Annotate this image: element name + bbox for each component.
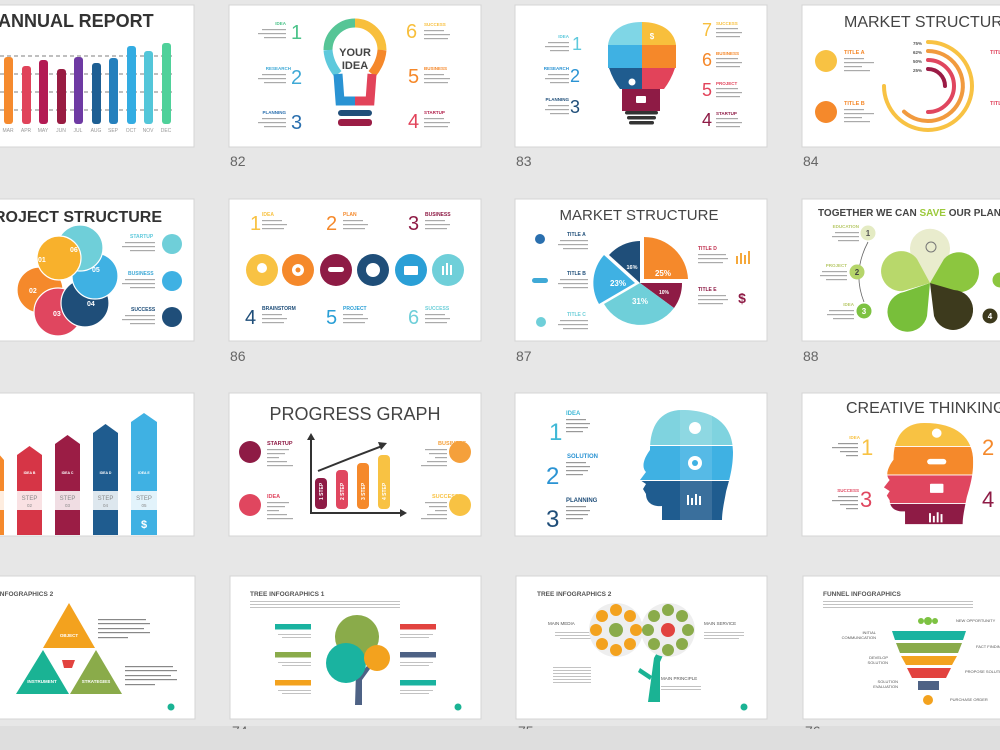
top row items: 1 (250, 213, 261, 235)
slide: annual report: OCT (126, 128, 136, 134)
left items: IDEA (275, 21, 287, 26)
left items: 2 (570, 66, 580, 86)
right items: STARTUP (716, 111, 737, 116)
bottom row items: 5 (326, 307, 337, 329)
right items: BUSINESS (424, 66, 447, 71)
slide 88: save our planet: 4 (988, 312, 993, 321)
title: MARKET STRUCTURE (560, 207, 718, 224)
slide 84: market structure rings: TITLE A (844, 50, 865, 56)
slide 87: market structure pie (515, 199, 767, 341)
top row items: 3 (408, 213, 419, 235)
right items: 5 (408, 66, 419, 88)
slide: annual report: MAR (2, 128, 14, 134)
slide: funnel infographics: EVALUATION (873, 684, 898, 689)
slide: progress graph (229, 393, 481, 536)
right items: BUSINESS (128, 271, 154, 277)
slide: funnel infographics: SOLUTION (878, 679, 898, 684)
right items (128, 234, 156, 313)
right items: SUCCESS (716, 21, 738, 26)
chart: axes and bars: 2 STEP (340, 482, 346, 500)
title: TREE INFOGRAPHICS 1 (250, 591, 325, 598)
slide: tree infographics 2: MAIN PRINCIPLE (661, 676, 697, 681)
slide: progress graph: SUCCESS (432, 494, 459, 500)
slide: tree infographics 2 (516, 576, 767, 719)
petal circles: 05 (92, 267, 100, 274)
tree illustration (326, 615, 390, 705)
slide: progress graph: BUSINESS (438, 441, 466, 447)
pie chart (593, 237, 688, 325)
slide numbers: 84 (803, 153, 819, 169)
right icons (449, 441, 471, 463)
left items: 3 (291, 112, 302, 134)
icon: segmented bulb (608, 22, 676, 124)
items: 3 (860, 487, 872, 512)
arrows: 02 (27, 503, 32, 508)
left items: PLANNING (262, 110, 286, 115)
slide: annual report: AUG (91, 128, 102, 134)
pie chart: 31% (632, 297, 648, 306)
petal circles: 04 (87, 301, 95, 308)
chart: axes and bars (307, 433, 407, 517)
slide: head blue (515, 393, 767, 536)
slide: tree infographics 1 (230, 576, 481, 719)
title: PROGRESS GRAPH (269, 404, 441, 424)
arrows: 03 (65, 503, 70, 508)
slide 86: six circles: IDEA (262, 212, 274, 218)
pie chart: 10% (659, 290, 670, 296)
numbered items: PLANNING (566, 498, 598, 504)
slide numbers: 88 (803, 348, 819, 364)
slide: tree infographics 2: MAIN SERVICE (704, 621, 736, 626)
icon: idea bulb: IDEA (342, 60, 368, 72)
slide: tree infographics 2: MAIN MEDIA (548, 621, 575, 626)
items: 4 (982, 487, 994, 512)
right items (698, 246, 717, 293)
slide: funnel infographics: NEW OPPORTUNITY (956, 618, 996, 623)
left items: RESEARCH (266, 66, 291, 71)
chart: axes and bars: 4 STEP (382, 482, 388, 500)
slide: triangle infographics 2 (0, 576, 195, 719)
right items: 6 (702, 50, 712, 70)
numbered items: 1 (549, 419, 562, 446)
slide: funnel infographics: INITIAL (862, 630, 877, 635)
tree with icon rings (589, 603, 695, 702)
slide 87: market structure pie: TITLE C (567, 312, 586, 318)
right items: 7 (702, 20, 712, 40)
petal circles: 06 (70, 247, 78, 254)
slide 86: six circles: PLAN (343, 212, 357, 218)
left items: 1 (572, 34, 582, 54)
bottom row items: 6 (408, 307, 419, 329)
numbered items: 3 (546, 506, 559, 533)
funnel (892, 617, 966, 705)
triangle diagram: STRATEGIES (82, 679, 110, 684)
arrows: STEP (60, 496, 75, 502)
petal circles: 03 (53, 311, 61, 318)
slide numbers: 75 (518, 723, 534, 739)
bottom row items (245, 307, 419, 329)
bottom row items: 4 (245, 307, 256, 329)
left items (532, 234, 548, 327)
right items: STARTUP (130, 234, 154, 240)
items (837, 435, 994, 512)
pie chart: 16% (626, 265, 638, 271)
numbered items: SOLUTION (567, 454, 598, 460)
slide 87: market structure pie: TITLE A (567, 232, 586, 238)
ring chart: 25% (913, 68, 922, 73)
slide numbers: 83 (516, 153, 532, 169)
arrows: $ (141, 519, 147, 531)
title: TREE INFOGRAPHICS 2 (537, 591, 612, 598)
ring chart: 50% (913, 59, 922, 64)
slide 86: six circles: PROJECT (343, 306, 367, 312)
arrows: IDEA E (138, 471, 150, 475)
slide: funnel infographics (803, 576, 1000, 719)
slide: annual report: MAY (38, 128, 49, 134)
items: IDEA (849, 435, 861, 440)
icon circles row (246, 254, 464, 286)
slide: progress graph: IDEA (267, 494, 280, 500)
left items: RESEARCH (544, 66, 569, 71)
top row items: 2 (326, 213, 337, 235)
slide: creative thinking (802, 393, 1000, 536)
steps left: PROJECT (826, 263, 847, 268)
steps left: EDUCATION (833, 224, 859, 229)
icon: idea bulb (328, 23, 382, 126)
arrows: IDEA D (100, 471, 112, 475)
right items (702, 20, 739, 130)
ring chart: 62% (913, 50, 922, 55)
right items: BUSINESS (716, 51, 739, 56)
right items: 4 (408, 111, 419, 133)
top row items (250, 213, 419, 235)
triangle diagram: INSTRUMENT (27, 679, 57, 684)
triangle diagram: OBJECT (60, 633, 78, 638)
right items: 6 (406, 21, 417, 43)
slide: funnel infographics: DEVELOP (869, 655, 888, 660)
slide 88: save our planet (802, 199, 1000, 341)
items: 2 (982, 435, 994, 460)
arrows: STEP (22, 496, 37, 502)
icon: segmented bulb: $ (650, 32, 655, 41)
icon: orange circle (815, 101, 837, 123)
slide 87: market structure pie: $ (738, 290, 746, 306)
right items: PROJECT (716, 81, 738, 86)
slide 86: six circles: SUCCESS (425, 306, 450, 312)
petal circles: 01 (38, 257, 46, 264)
arrows: IDEA C (62, 471, 74, 475)
slide 88: save our planet: 2 (855, 268, 860, 277)
arrows: STEP (136, 496, 152, 502)
pie chart: 23% (610, 279, 626, 288)
arrows (0, 413, 165, 535)
left icons (239, 441, 261, 463)
icon: yellow circle (815, 50, 837, 72)
slide: funnel infographics: PURCHASE ORDER (950, 697, 988, 702)
slide 86: six circles: BUSINESS (425, 212, 451, 218)
slide: annual report: JUL (74, 128, 83, 134)
slide numbers: 87 (516, 348, 532, 364)
slide 86: six circles (229, 199, 481, 341)
items: 1 (861, 435, 873, 460)
slide: annual report: APR (21, 128, 32, 134)
arrows: 05 (141, 503, 147, 508)
petal circles: 02 (29, 288, 37, 295)
right items: TITLE E (698, 287, 717, 293)
slide: annual report: SEP (108, 128, 119, 134)
left items: 1 (291, 22, 302, 44)
arrows: 04 (103, 503, 108, 508)
ring chart (884, 41, 972, 130)
bar chart (4, 43, 171, 124)
petal flower (881, 229, 979, 332)
triangle diagram (16, 603, 122, 694)
left items: 3 (570, 97, 580, 117)
left items (544, 34, 582, 117)
slide: annual report: JUN (56, 128, 66, 134)
steps left (826, 224, 859, 307)
slide numbers (230, 153, 821, 739)
right items: SUCCESS (131, 307, 156, 313)
ring chart: 75% (913, 41, 922, 46)
arrows: IDEA B (24, 471, 36, 475)
left items: PLANNING (546, 97, 569, 102)
slide: annual report: NOV (143, 128, 154, 134)
slide 86: six circles: BRAINSTORM (262, 306, 296, 312)
left items: IDEA (558, 34, 570, 39)
label bars (275, 624, 436, 686)
right items: 5 (702, 80, 712, 100)
icon: idea bulb: YOUR (339, 47, 371, 59)
icon: head bands (884, 423, 974, 524)
slide numbers: 74 (232, 723, 248, 739)
steps left: IDEA (843, 302, 855, 307)
slide numbers: 82 (230, 153, 246, 169)
slide: annual report (0, 5, 194, 147)
slide 87: market structure pie: TITLE B (567, 271, 586, 277)
arrows: STEP (98, 496, 113, 502)
chart: axes and bars: 1 STEP (319, 482, 325, 500)
slide 84: market structure rings: TITLE B (844, 101, 865, 107)
right items (406, 21, 447, 133)
items: SUCCESS (837, 488, 859, 493)
left items: 2 (291, 67, 302, 89)
slide 83: bulb grid (515, 5, 767, 147)
left items (262, 21, 302, 134)
slide 88: save our planet: 3 (862, 307, 867, 316)
slide 88: save our planet: 1 (866, 229, 871, 238)
numbered items: IDEA (566, 411, 581, 417)
slide: funnel infographics: COMMUNICATION (842, 635, 876, 640)
icon: head (640, 410, 733, 520)
right items: STARTUP (424, 110, 445, 115)
slide: project structure (0, 199, 194, 341)
slide: step arrows (0, 393, 194, 536)
right items: SUCCESS (424, 22, 446, 27)
petal circles (17, 225, 118, 336)
slide numbers: 76 (805, 723, 821, 739)
numbered items: 2 (546, 463, 559, 490)
slide 82: your idea bulb (229, 5, 481, 147)
slide: annual report: DEC (161, 128, 172, 134)
chart: axes and bars: 3 STEP (361, 482, 367, 500)
right items: TITLE D (698, 246, 717, 252)
title: annual report: ANNUAL REPORT (0, 11, 154, 31)
numbered items (546, 411, 598, 533)
title: FUNNEL INFOGRAPHICS (823, 591, 902, 598)
slide numbers: 86 (230, 348, 246, 364)
right items: 4 (702, 110, 712, 130)
pie chart: 25% (655, 269, 671, 278)
slide: funnel infographics: SOLUTION (868, 660, 888, 665)
slide 84: market structure rings (802, 5, 1000, 147)
slide: progress graph: STARTUP (267, 441, 293, 447)
